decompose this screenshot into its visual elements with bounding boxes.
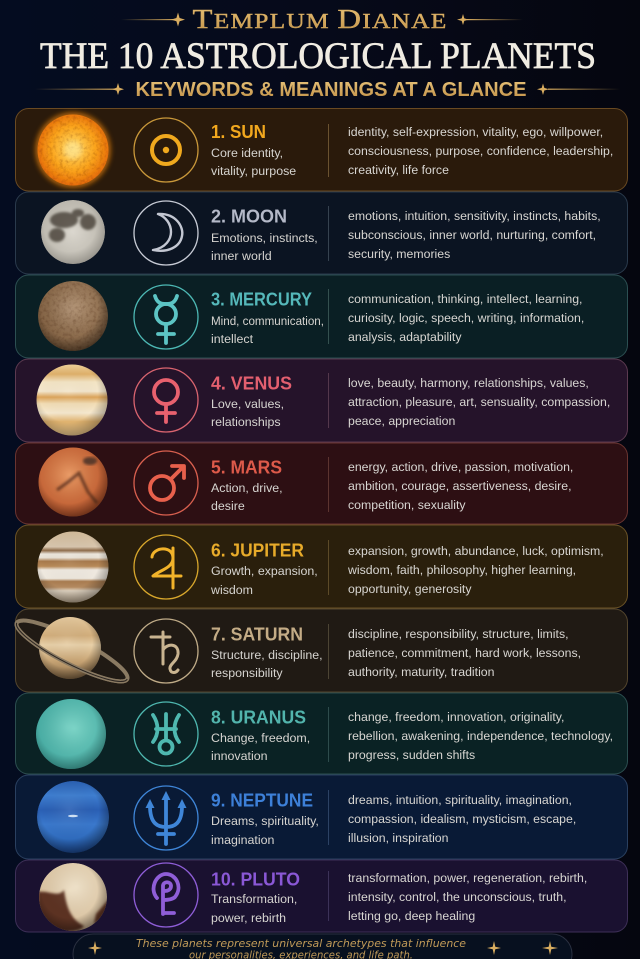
- icon: pluto symbol: [134, 863, 198, 927]
- summary: imagination: [211, 833, 274, 847]
- subtitle: KEYWORDS & MEANINGS AT A GLANCE: [136, 78, 526, 101]
- keywords: peace, appreciation: [348, 414, 455, 428]
- summary: Transformation,: [211, 892, 297, 906]
- panel: mercury: [16, 275, 628, 358]
- card: [16, 108, 628, 191]
- summary: Love, values,: [211, 397, 284, 411]
- summary: responsibility: [211, 666, 283, 680]
- panel: moon: [16, 192, 628, 274]
- keywords: intensity, control, the unconscious, truth,: [348, 890, 566, 904]
- name: 5. MARS: [211, 458, 282, 478]
- keywords: progress, sudden shifts: [348, 748, 475, 762]
- keywords: letting go, deep healing: [348, 909, 475, 923]
- footer callout: [73, 934, 572, 959]
- keywords: creativity, life force: [348, 163, 449, 177]
- planet: neptune: [37, 781, 109, 853]
- card: [16, 192, 628, 274]
- summary: Core identity,: [211, 146, 283, 160]
- planet: mercury: [38, 281, 108, 351]
- name: 9. NEPTUNE: [211, 790, 313, 810]
- card: [16, 860, 628, 932]
- keywords: opportunity, generosity: [348, 582, 472, 596]
- keywords: emotions, intuition, sensitivity, instincts, habits,: [348, 209, 601, 223]
- panel: jupiter: [16, 525, 628, 608]
- summary: power, rebirth: [211, 911, 286, 925]
- main title: THE 10 ASTROLOGICAL PLANETS: [40, 36, 596, 77]
- card: [16, 693, 628, 774]
- summary: Structure, discipline,: [211, 648, 323, 662]
- keywords: transformation, power, regeneration, rebirth,: [348, 871, 587, 885]
- keywords: compassion, idealism, mysticism, escape,: [348, 812, 576, 826]
- subtitle ornaments: [35, 83, 620, 95]
- footer pill: [73, 934, 572, 959]
- keywords: rebellion, awakening, independence, technology,: [348, 729, 613, 743]
- name: 6. JUPITER: [211, 540, 304, 560]
- keywords: security, memories: [348, 247, 450, 261]
- icon: mercury symbol: [134, 285, 198, 349]
- keywords: curiosity, logic, speech, writing, information,: [348, 311, 584, 325]
- icon: sun symbol: [134, 118, 198, 182]
- brand title: TEMPLUM DIANAE: [192, 4, 448, 34]
- keywords: love, beauty, harmony, relationships, values,: [348, 376, 589, 390]
- name: 7. SATURN: [211, 624, 303, 644]
- planet: moon: [41, 200, 105, 264]
- summary: Growth, expansion,: [211, 564, 318, 578]
- keywords: attraction, pleasure, art, sensuality, compassion,: [348, 395, 610, 409]
- planet: mars: [38, 447, 108, 517]
- icon: venus symbol: [134, 368, 198, 432]
- keywords: identity, self-expression, vitality, ego, willpower,: [348, 125, 603, 139]
- card: [16, 775, 628, 859]
- summary: Dreams, spirituality,: [211, 814, 319, 828]
- panel: sun: [16, 108, 628, 191]
- planet: pluto: [38, 863, 108, 932]
- panel: mars: [16, 443, 628, 524]
- icon: jupiter symbol: [134, 535, 198, 599]
- name: 10. PLUTO: [211, 870, 300, 890]
- keywords: wisdom, faith, philosophy, higher learning,: [347, 563, 576, 577]
- name: 3. MERCURY: [211, 290, 312, 310]
- planet: venus: [36, 364, 108, 436]
- planet: jupiter: [37, 531, 109, 603]
- header: [35, 4, 620, 101]
- keywords: consciousness, purpose, confidence, leadership,: [348, 144, 613, 158]
- panel: neptune: [16, 775, 628, 859]
- summary: Emotions, instincts,: [211, 231, 318, 245]
- summary: wisdom: [210, 583, 253, 597]
- panel: saturn: [11, 609, 628, 692]
- icon: moon symbol: [134, 201, 198, 265]
- brand ornaments: [121, 12, 523, 26]
- summary: inner world: [211, 249, 272, 263]
- summary: vitality, purpose: [211, 164, 296, 178]
- summary line 2: intellect: [211, 332, 254, 346]
- summary: relationships: [211, 415, 281, 429]
- keywords: competition, sexuality: [348, 498, 466, 512]
- keywords: ambition, courage, assertiveness, desire,: [348, 479, 572, 493]
- keywords: authority, maturity, tradition: [348, 665, 495, 679]
- panel: pluto: [16, 860, 628, 932]
- card: [16, 525, 628, 608]
- keywords: change, freedom, innovation, originality,: [348, 710, 564, 724]
- summary: Change, freedom,: [211, 731, 310, 745]
- keywords: illusion, inspiration: [348, 831, 449, 845]
- name: 4. VENUS: [211, 374, 292, 394]
- summary: Mind, communication,: [211, 314, 324, 328]
- card: [16, 609, 628, 692]
- summary: desire: [211, 499, 245, 513]
- summary: Action, drive,: [211, 481, 283, 495]
- icon: uranus symbol: [134, 702, 198, 766]
- keywords: dreams, intuition, spirituality, imagination,: [348, 793, 572, 807]
- summary: innovation: [211, 749, 268, 763]
- keywords: patience, commitment, hard work, lessons,: [348, 646, 581, 660]
- icon: neptune symbol: [134, 786, 198, 850]
- panel: uranus: [16, 693, 628, 774]
- keywords: discipline, responsibility, structure, limits,: [348, 627, 569, 641]
- name: 8. URANUS: [211, 708, 306, 728]
- name: 1. SUN: [211, 122, 266, 142]
- keywords: energy, action, drive, passion, motivation,: [348, 460, 573, 474]
- planet: saturn: [11, 611, 133, 691]
- planet: sun: [35, 112, 111, 188]
- planet: uranus: [36, 699, 106, 769]
- panel: venus: [16, 359, 628, 442]
- card: [16, 443, 628, 524]
- icon: saturn symbol: [134, 619, 198, 683]
- keywords: expansion, growth, abundance, luck, optimism,: [348, 544, 604, 558]
- footer stars: [88, 941, 558, 955]
- card: [16, 359, 628, 442]
- card: [16, 275, 628, 358]
- keywords: communication, thinking, intellect, learning,: [348, 292, 582, 306]
- keywords: analysis, adaptability: [348, 330, 462, 344]
- footer text: These planets represent universal archetypes that influence: [136, 937, 466, 950]
- keywords: subconscious, inner world, nurturing, comfort,: [348, 228, 596, 242]
- icon: mars symbol: [134, 451, 198, 515]
- name: 2. MOON: [211, 206, 287, 226]
